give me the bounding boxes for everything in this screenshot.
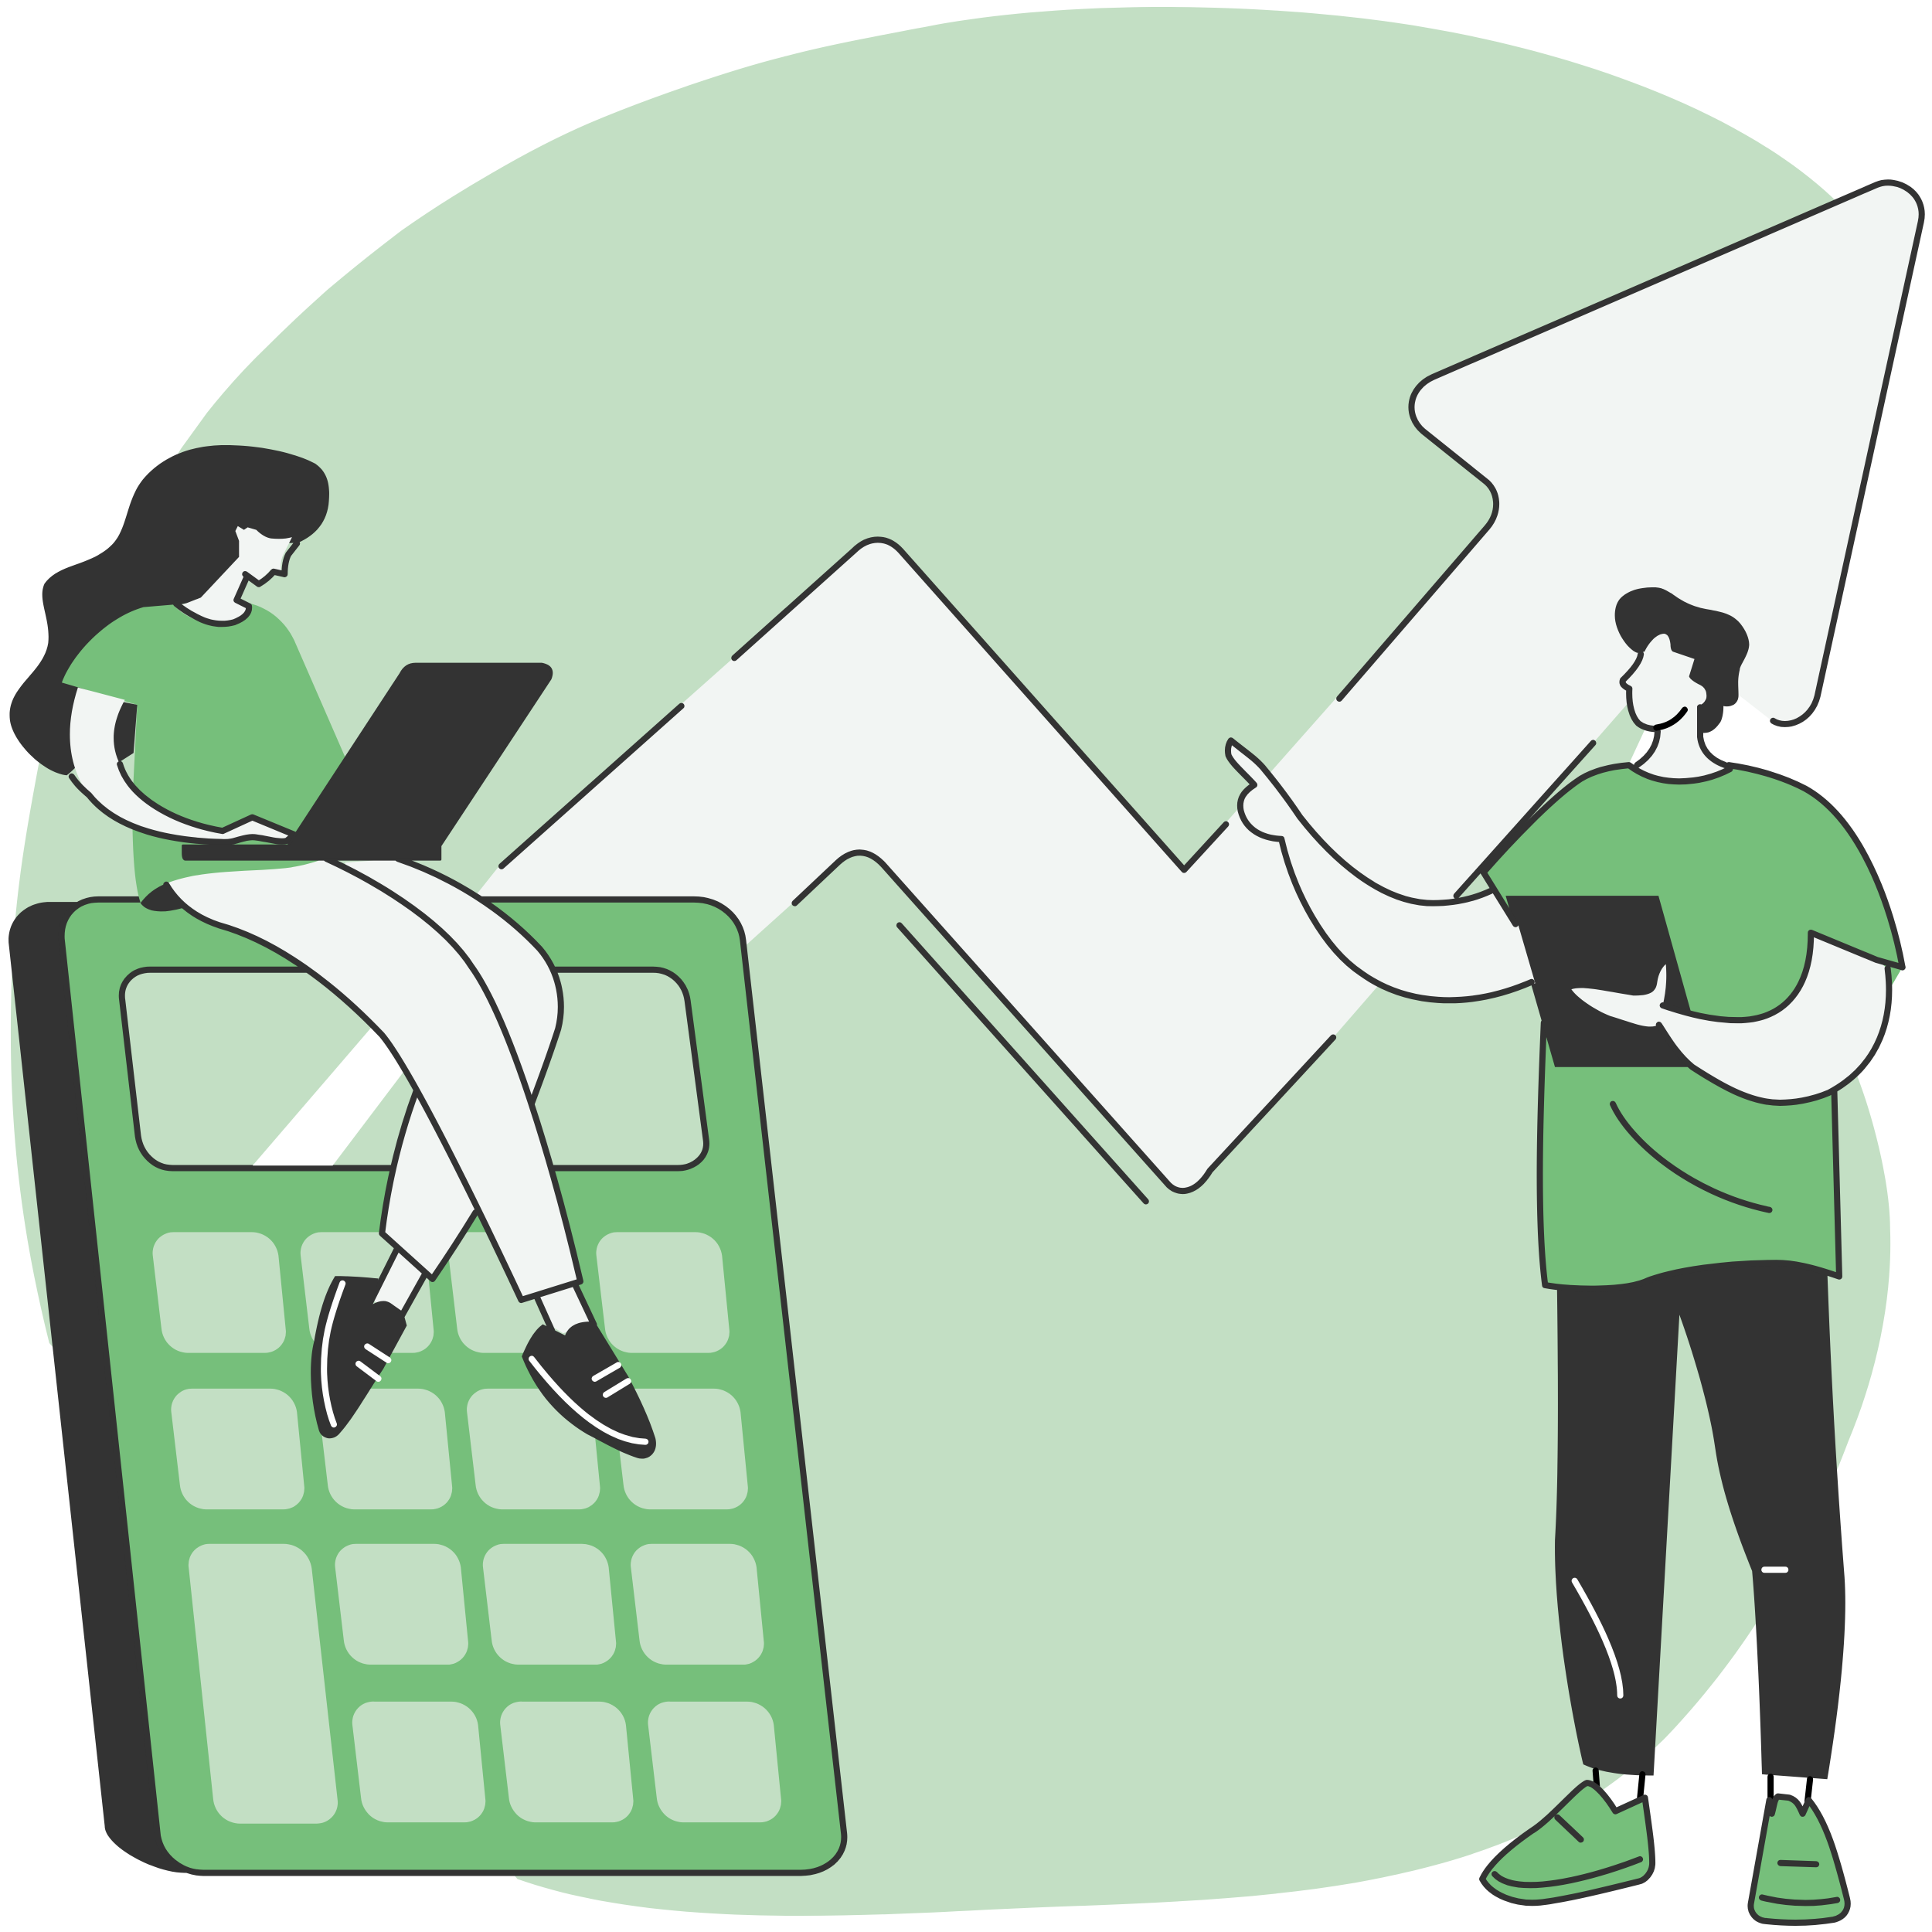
tablet: [1505, 896, 1725, 1067]
man trousers: [1555, 1232, 1845, 1779]
front lower leg: [536, 1283, 595, 1333]
man pointing arm: [1228, 740, 1536, 1001]
woman shirt: [62, 604, 359, 904]
laptop: [183, 664, 552, 859]
smile: [1656, 709, 1685, 728]
right green shoe: [1750, 1777, 1848, 1923]
woman face and neck: [176, 526, 297, 624]
back leg trousers: [345, 859, 561, 1279]
shirt crease: [1613, 1104, 1770, 1210]
calculator: [9, 900, 844, 1872]
front leg trousers: [166, 858, 580, 1300]
man pointing at arrow: [1228, 587, 1903, 1923]
woman sitting with laptop: [9, 445, 656, 1459]
back lower leg: [369, 1250, 425, 1316]
woman hair: [9, 445, 329, 775]
man hair: [1615, 587, 1749, 733]
woman arm: [70, 688, 294, 842]
growth arrow: [431, 182, 1922, 1202]
man shirt: [1484, 765, 1903, 1289]
left green shoe: [1482, 1770, 1652, 1903]
calculator keys: [153, 1232, 781, 1824]
trouser highlights: [1575, 1570, 1785, 1696]
left shoe: [311, 1276, 406, 1438]
calculator back side: [9, 902, 247, 1872]
woman legs: [166, 858, 595, 1333]
man neck and head: [1615, 587, 1749, 781]
hair behind arm: [74, 692, 138, 774]
calculator screen: [122, 970, 706, 1168]
right shoe: [522, 1321, 656, 1459]
dark seat shadow: [141, 883, 182, 911]
calculator body: [62, 900, 844, 1872]
man arm holding tablet: [1571, 933, 1903, 1103]
